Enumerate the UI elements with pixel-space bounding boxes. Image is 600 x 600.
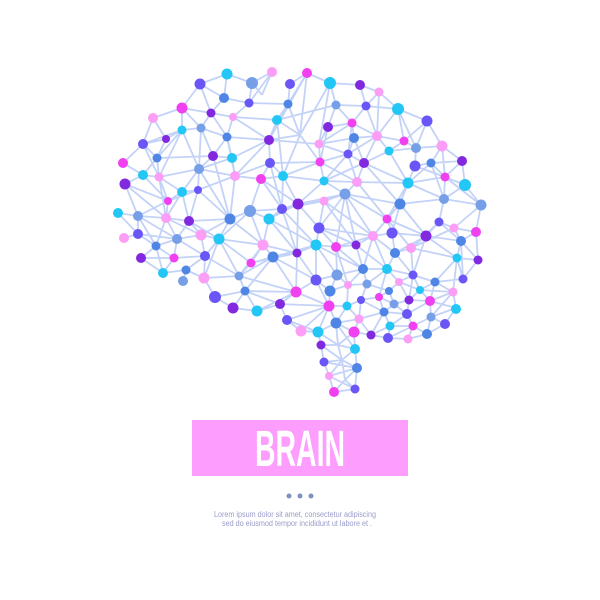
title banner xyxy=(192,420,408,477)
brain network illustration xyxy=(113,67,486,397)
three dots separator xyxy=(286,494,314,498)
title text: BRAIN xyxy=(255,420,345,477)
network nodes xyxy=(113,67,486,397)
caption text: sed do eiusmod tempor incididunt ut labore et . xyxy=(222,519,372,528)
caption text xyxy=(214,510,376,528)
caption text: Lorem ipsum dolor sit amet, consectetur adipiscing xyxy=(214,510,376,519)
network edges xyxy=(118,72,481,392)
